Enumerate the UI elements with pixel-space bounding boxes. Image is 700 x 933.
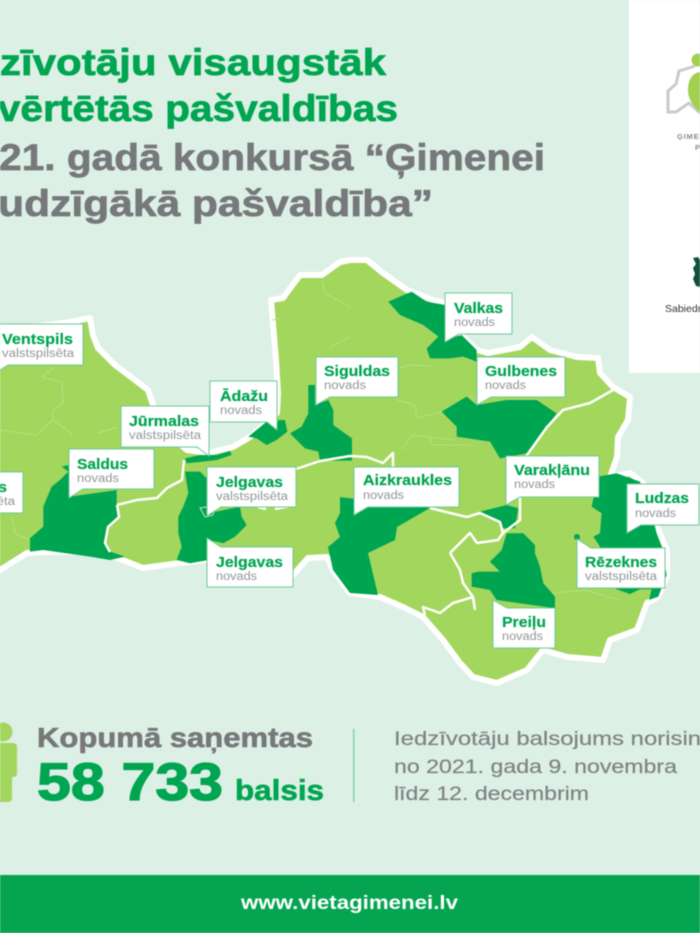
callout: Jūrmalas: Jūrmalas [129, 414, 199, 430]
callout: Jelgavas valstspilsēta: valstspilsēta [216, 491, 289, 503]
callout: Ādažu: Ādažu [220, 388, 268, 405]
panel: logos [629, 0, 700, 373]
callout: Jelgavas novads: novads [216, 571, 257, 583]
callout: Ventspils: Ventspils [2, 332, 73, 348]
callout: Preiļu: novads [502, 631, 543, 643]
callout: Rēzeknes: valstspilsēta [585, 571, 658, 583]
region: Valkas [388, 292, 477, 362]
region: Saldus [30, 465, 125, 560]
region: Jūrmalas [185, 451, 232, 463]
voting period text: Iedzīvotāju balsojums norisinājās [394, 728, 700, 750]
callout: Ventspils: valstspilsēta [2, 348, 75, 360]
callout: Jūrmalas: valstspilsēta [129, 430, 202, 442]
icon: foundation emblem [693, 257, 700, 287]
region: Preiļu [472, 533, 555, 608]
callout: Gulbenes [477, 357, 565, 405]
footer bar [0, 875, 700, 933]
region: Ādažu [248, 420, 287, 445]
callout: Liepājas [0, 472, 23, 513]
callout: Siguldas [316, 357, 398, 405]
callout: Jelgavas novads: Jelgavas [216, 555, 283, 571]
region: Aizkraukles [328, 497, 430, 595]
callout: Aizkraukles [354, 467, 459, 515]
callout: Rēzeknes [577, 539, 665, 588]
callout: Jelgavas valstspilsēta [207, 467, 296, 516]
region: Jelgavas [177, 472, 247, 563]
total votes text: Kopumā saņemtas [37, 722, 313, 753]
callout: Gulbenes: Gulbenes [485, 364, 557, 380]
total votes text: 58 733 [37, 753, 223, 812]
callout: Saldus [69, 449, 154, 498]
callout: Varakļānu [506, 456, 599, 505]
title [0, 42, 545, 224]
callout: Rēzeknes: Rēzeknes [585, 555, 657, 571]
region: Varakļānu [480, 505, 518, 528]
map base [0, 260, 667, 683]
callout: Preiļu [493, 600, 555, 648]
callout: Jūrmalas [121, 406, 209, 456]
dark regions [30, 292, 667, 608]
callout: Jelgavas valstspilsēta: Jelgavas [216, 475, 283, 491]
callout: Ludzas: novads [635, 508, 676, 520]
callout: Aizkraukles: Aizkraukles [363, 473, 452, 489]
callout: Preiļu: Preiļu [502, 615, 546, 631]
callout: Varakļānu: Varakļānu [514, 463, 590, 479]
region: Gulbenes [442, 397, 557, 458]
callout: Saldus: novads [77, 473, 119, 485]
website: www.vietagimenei.lv [240, 892, 458, 914]
region: Siguldas [290, 385, 352, 461]
icon: family-friendly municipality logo [668, 54, 700, 113]
callout: Siguldas: novads [324, 380, 366, 392]
callout: Gulbenes: novads [485, 380, 526, 392]
callout: Ludzas: Ludzas [635, 491, 689, 507]
callout: Saldus: Saldus [77, 457, 128, 473]
voting period text: no 2021. gada 9. novembra [394, 756, 677, 778]
voting period text [394, 728, 700, 805]
callout: Jelgavas novads [207, 538, 293, 587]
total votes text: balsis [235, 775, 324, 807]
callout: Ludzas [627, 484, 699, 533]
total votes text [37, 722, 324, 812]
callout: Valkas [445, 293, 512, 342]
callout: Varakļānu: novads [514, 479, 555, 491]
callout: Valkas: novads [454, 317, 495, 329]
map of Latvia [0, 260, 699, 683]
region: Ludzas [592, 473, 667, 600]
icon: person [0, 722, 17, 802]
callout: Ādažu: novads [220, 405, 262, 417]
callout: Siguldas: Siguldas [324, 364, 390, 380]
callout: Ventspils [0, 324, 83, 374]
voting period text: līdz 12. decembrim [394, 783, 589, 805]
thick regional borders [105, 390, 613, 615]
callout: Valkas: Valkas [454, 301, 503, 317]
divider [353, 729, 354, 802]
callout: Aizkraukles: novads [363, 490, 404, 502]
thin district borders [0, 280, 620, 600]
callout: Ādažu [210, 381, 277, 430]
region: Rēzeknes [574, 534, 580, 540]
